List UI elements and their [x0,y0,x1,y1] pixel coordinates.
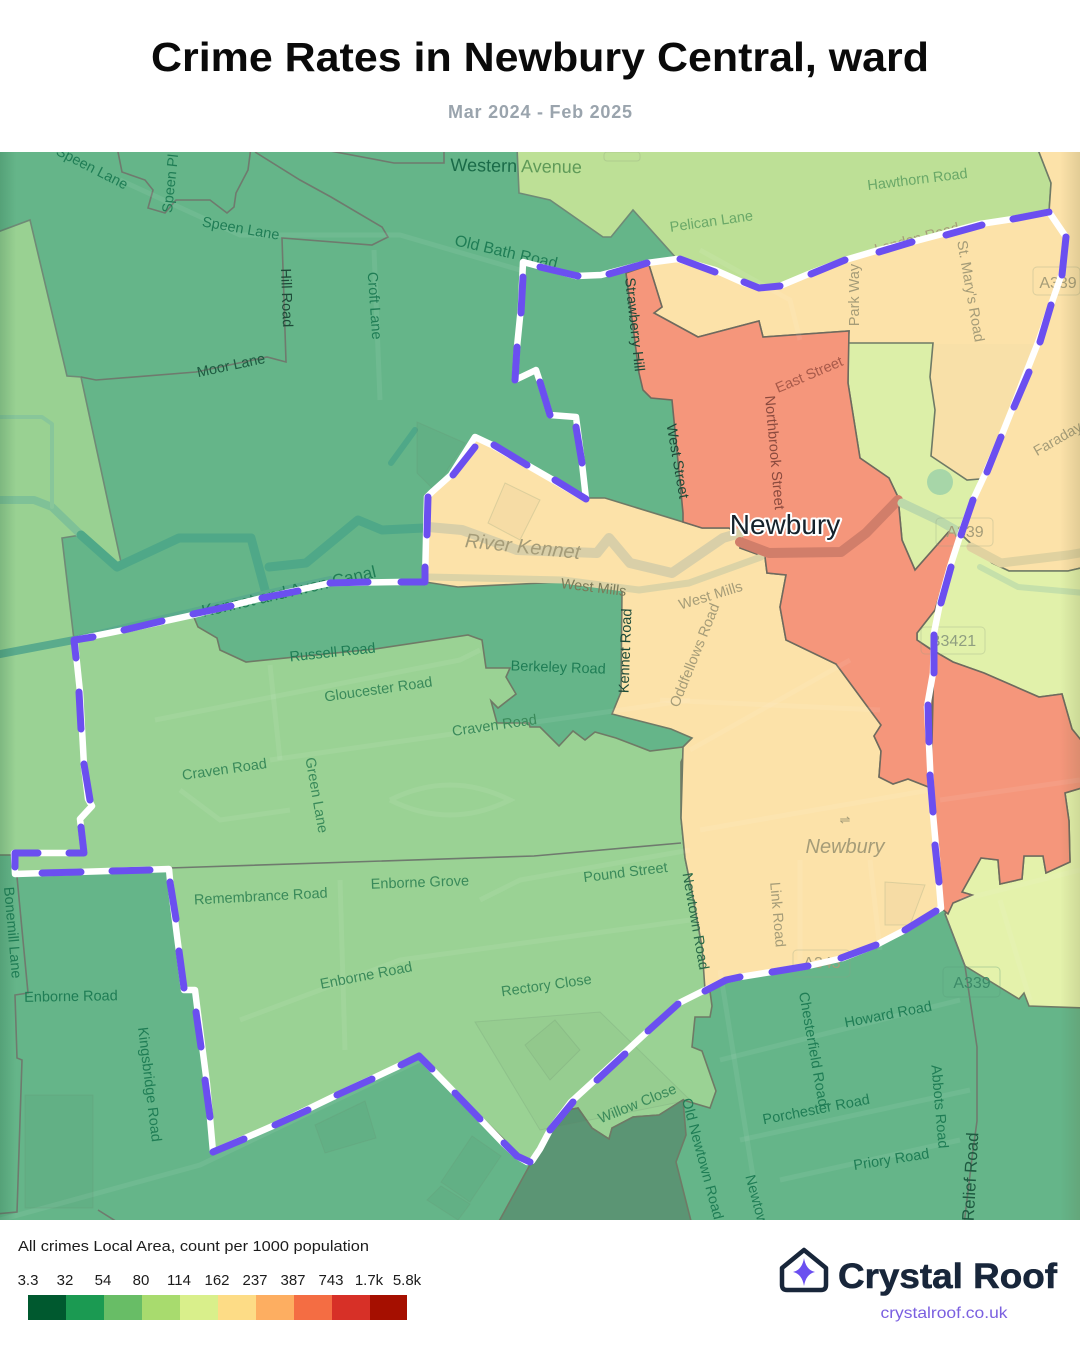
building and field shapes [25,422,925,1220]
road labels: Bonemill Lane [0,886,24,979]
road labels: London Road [873,220,961,258]
legend scale labels: 32 [57,1272,73,1289]
brand name: Crystal Roof [838,1257,1057,1296]
road labels: ⇌ [840,812,851,827]
road labels: Strawberry Hill [621,277,647,372]
road labels: Kennet and Avon Canal [200,562,378,621]
legend title: All crimes Local Area, count per 1000 population [18,1238,369,1255]
region: pale park area [848,343,980,570]
legend scale labels: 743 [318,1272,344,1289]
boundary lines [0,147,977,1225]
road labels: Relief Road [959,1132,982,1220]
road labels: East Street [773,354,846,397]
road labels: Craven Road [181,756,268,784]
region: north-east yellow area [649,147,1080,571]
region: dark green south area [497,1100,692,1225]
road labels: Howard Road [843,999,933,1031]
region: green base area [0,152,1080,1220]
road labels: Priory Road [852,1146,930,1174]
road labels: Rectory Close [500,972,593,1000]
road labels: Park Way [847,263,863,326]
lake [927,469,953,495]
region: northern light green area [517,147,1051,288]
legend scale labels: 54 [95,1272,111,1289]
region: western light green area [0,220,122,655]
road labels: Chesterfield Road [795,991,831,1108]
road labels: Gloucester Road [323,675,433,706]
road labels: Hawthorn Road [867,166,968,194]
road labels: Abbots Road [927,1064,951,1149]
road labels: Croft Lane [364,271,384,340]
region: south-east pale area [945,787,1080,1008]
road labels: West Street [663,423,691,500]
road labels: Willow Close [596,1081,679,1127]
road labels: Hill Road [277,268,295,328]
region: tan built-up patch [930,344,1035,480]
road labels: Russell Road [289,641,376,665]
logo: Crystal Roof [780,1248,1058,1322]
road labels: Newtown Road [679,871,711,971]
edge shading [0,152,1080,1220]
icon: house outline with star [782,1250,826,1290]
road labels: Remembrance Road [194,886,328,908]
road labels: Western Avenue [450,155,582,177]
road labels: Green Lane [301,756,330,834]
region: central yellow ward area [425,437,941,990]
road labels: Newbury [806,836,885,858]
road labels: Old Bath Road [453,233,559,273]
legend scale labels: 114 [167,1272,191,1289]
ward boundary: white line [14,212,1066,1162]
road labels: Enborne Road [319,959,414,993]
region: eastern red area [931,651,1080,914]
road labels: Kennet Road [617,608,635,693]
website: crystalroof.co.uk [880,1305,1009,1322]
road labels: Northbrook Street [761,395,787,510]
road labels: Enborne Road [24,988,118,1006]
road labels: Speen Lane [201,214,281,244]
legend scale labels: 1.7k [355,1272,384,1289]
road labels: St. Mary's Road [953,239,987,343]
road labels: Pelican Lane [669,208,754,236]
region: central red area [626,265,959,788]
road labels: Kingsbridge Road [134,1026,164,1143]
legend scale labels: 80 [133,1272,149,1289]
choropleth map [0,152,1080,1220]
road labels: Craven Road [451,712,538,740]
legend scale labels [18,1272,422,1289]
title: Crime Rates in Newbury Central, ward [151,34,929,80]
road labels: Link Road [766,881,788,948]
road number shields: A339 [1039,275,1077,292]
road labels: West Mills [560,576,627,600]
legend scale labels: 162 [204,1272,230,1289]
legend colour swatches [28,1295,407,1320]
faint road network [0,180,1080,1220]
rivers and canal [0,417,1080,655]
road labels: Oddfellows Road [667,601,723,710]
road labels: Porchester Road [761,1092,871,1128]
road labels: Moor Lane [196,351,267,381]
road number shields: A339 [953,975,991,992]
region: eastern pale area [917,532,1080,745]
subtitle: date range: Mar 2024 - Feb 2025 [448,102,632,122]
legend scale labels: 387 [280,1272,306,1289]
road labels: West Mills [677,579,745,613]
road number shields [604,152,1080,997]
road labels: River Kennet [464,530,583,564]
legend scale labels: 5.8k [393,1272,422,1289]
road number shields: A343 [803,955,841,972]
road labels: Speen Pl [160,153,182,214]
road labels: Old Newtown Road [678,1097,726,1220]
road labels: Enborne Grove [370,873,469,893]
legend scale labels: 237 [242,1272,268,1289]
road labels: Berkeley Road [510,658,606,678]
town label: Newbury: Newbury [730,509,840,540]
region: main light green ward area [0,615,716,1162]
ward boundary: purple dashes [15,212,1066,1162]
legend [18,1238,422,1320]
road number shields: B3421 [930,633,976,650]
legend scale labels: 3.3 [18,1272,38,1289]
road labels: Pound Street [583,860,669,886]
road number shields: A339 [946,524,984,541]
